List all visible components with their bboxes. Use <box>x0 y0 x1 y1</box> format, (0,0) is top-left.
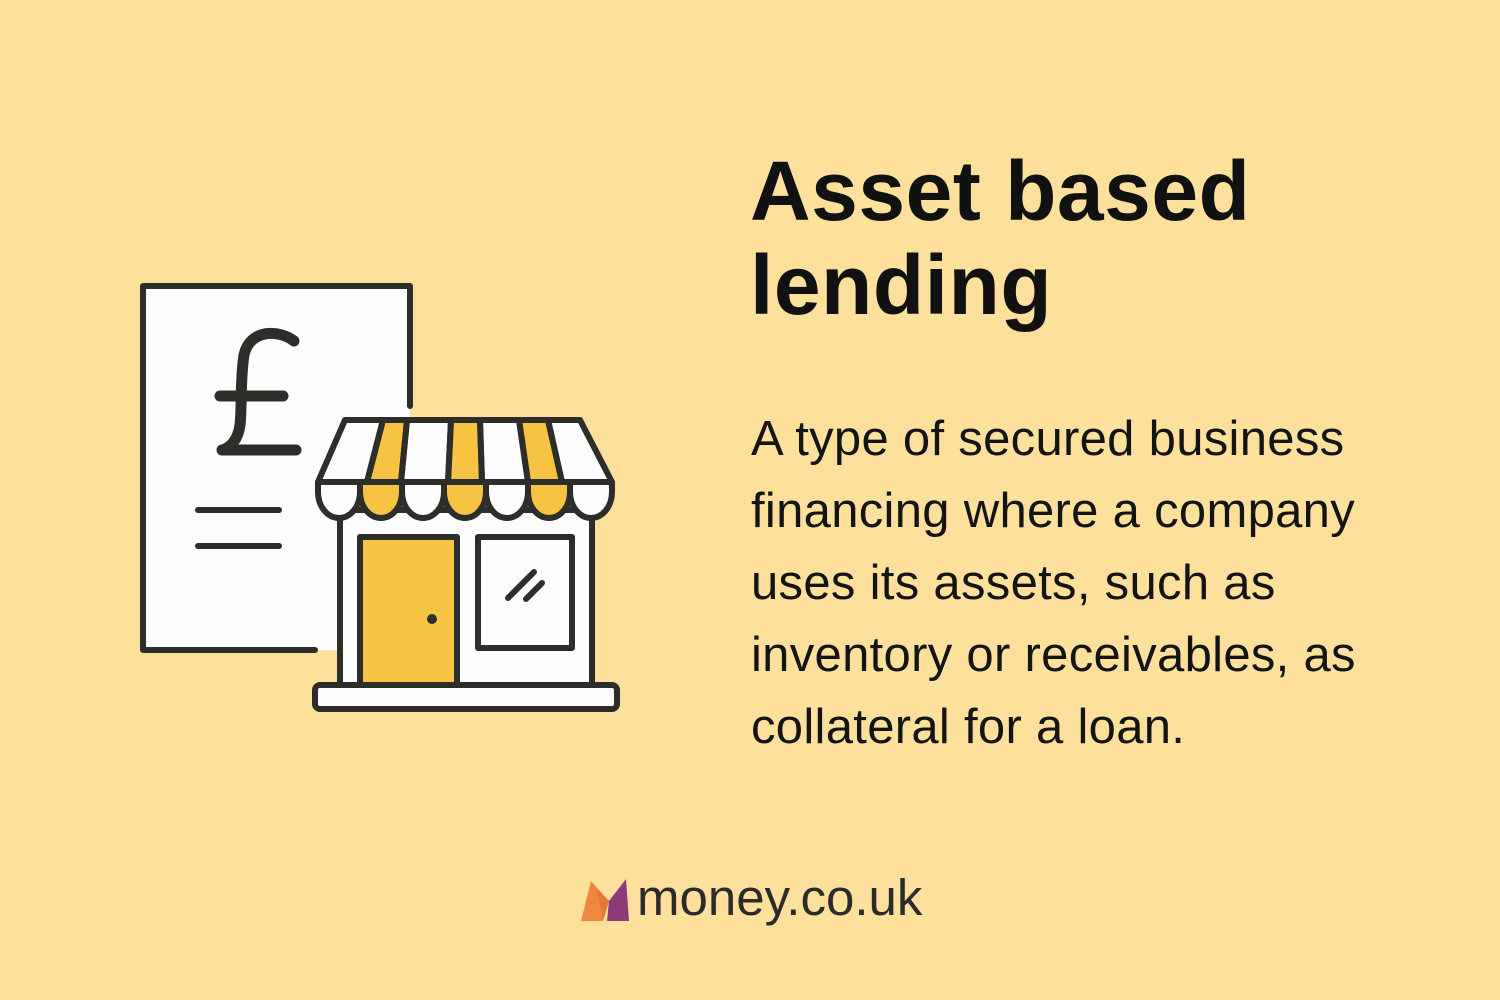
illustration: invoice and shop <box>140 283 620 712</box>
text block: definition: financing where a company <box>751 484 1355 538</box>
text block: definition: A type of secured business <box>751 412 1344 466</box>
icon: pound sign <box>220 333 296 450</box>
logo: money.co.uk: money.co.uk <box>637 869 922 926</box>
icon: invoice document <box>143 286 410 650</box>
text block: definition: uses its assets, such as <box>751 556 1276 610</box>
title: Asset based <box>750 144 1250 238</box>
title <box>750 144 1250 332</box>
text block: definition: inventory or receivables, as <box>751 628 1356 682</box>
title: lending <box>750 238 1052 332</box>
icon: shop <box>315 420 617 709</box>
text block: definition: collateral for a loan. <box>751 700 1185 754</box>
text block: definition <box>751 412 1356 754</box>
